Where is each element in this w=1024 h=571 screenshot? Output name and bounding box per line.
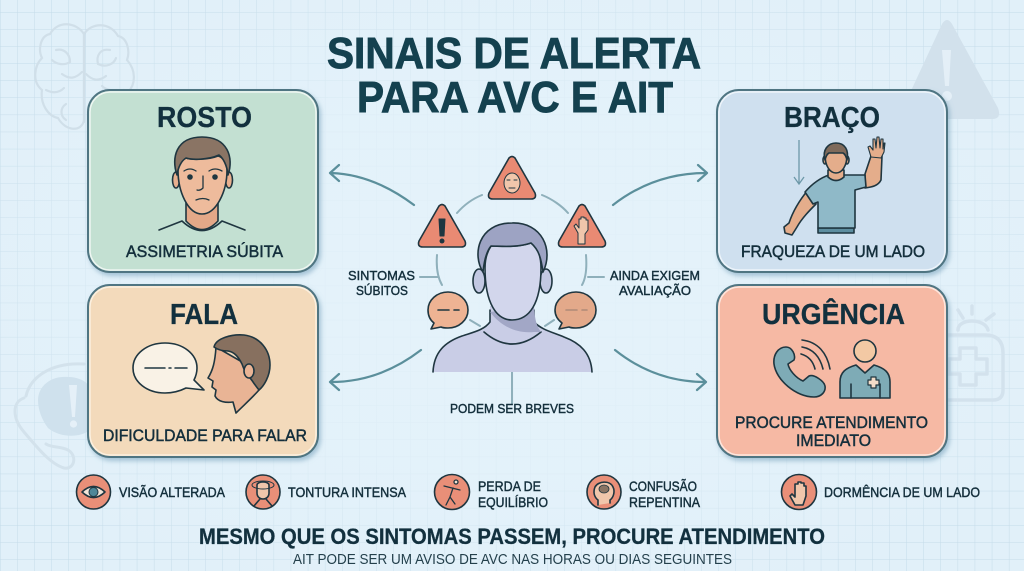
icon: face: [159, 137, 245, 230]
title: SINAIS DE ALERTA: [327, 29, 701, 78]
symptom: visão alterada: VISÃO ALTERADA: [119, 484, 226, 500]
symptom: confusão repentina: CONFUSÃO: [629, 478, 697, 494]
icon: medic: [840, 340, 890, 398]
arrow: to urgência: [615, 350, 706, 390]
label: assimetria súbita: ASSIMETRIA SÚBITA: [126, 242, 284, 261]
symptom: tontura intensa: [246, 475, 407, 509]
arrow: to rosto: [330, 165, 414, 205]
heading: fala: FALA: [170, 299, 238, 331]
label: podem ser breves: PODEM SER BREVES: [450, 401, 574, 416]
warning triangle: hand: [558, 204, 606, 247]
symptom: perda de equilíbrio: [434, 474, 548, 510]
icon: arrow down: [794, 140, 804, 184]
heading: braço: BRAÇO: [784, 102, 880, 134]
panel: urgência: [717, 285, 947, 457]
panel: braço: [717, 90, 947, 272]
panel: rosto: [88, 90, 318, 272]
label: ainda exigem avaliação: AINDA EXIGEM: [610, 268, 700, 283]
speech bubble: right: [555, 292, 596, 329]
icon: head in profile: [208, 335, 270, 413]
closing message: MESMO QUE OS SINTOMAS PASSEM, PROCURE ATENDIMENTO: [199, 524, 825, 549]
label: sintomas súbitos: SINTOMAS: [348, 268, 415, 283]
icon: speech bubble: [133, 343, 204, 393]
icon: person raising arm: [784, 137, 885, 235]
closing message: [199, 524, 825, 568]
speech bubble: left: [428, 292, 468, 329]
label: dificuldade para falar: DIFICULDADE PARA FALAR: [103, 426, 307, 445]
symptom: tontura intensa: TONTURA INTENSA: [288, 484, 407, 500]
label: ainda exigem avaliação: AVALIAÇÃO: [619, 283, 691, 298]
background icon: phone with alert: [15, 364, 90, 468]
panel: fala: [88, 285, 318, 457]
heading: rosto: ROSTO: [157, 102, 252, 134]
background icon: medical kit with siren: [945, 306, 1003, 400]
background icon: brain: [35, 24, 134, 129]
symptom: confusão repentina: [587, 475, 701, 510]
background icon: warning triangle: [901, 20, 999, 119]
symptom: dormência de um lado: [782, 474, 980, 510]
label: procure atendimento imediato: [735, 413, 928, 450]
symptom: confusão repentina: REPENTINA: [629, 494, 701, 510]
label: procure atendimento imediato: IMEDIATO: [796, 431, 871, 450]
warning triangle: face: [488, 156, 536, 199]
arrow: to fala: [330, 350, 421, 390]
title: PARA AVC E AIT: [357, 73, 673, 122]
central person: [433, 223, 592, 372]
closing message: AIT PODE SER UM AVISO DE AVC NAS HORAS OU DIAS SEGUINTES: [293, 551, 732, 568]
connector ring: [420, 195, 604, 404]
title: [327, 29, 701, 122]
warning triangle: exclamation: [418, 204, 466, 247]
arrow: to braço: [613, 165, 707, 205]
icon: phone: [774, 340, 830, 397]
label: procure atendimento imediato: PROCURE ATENDIMENTO: [735, 413, 928, 432]
symptom: visão alterada: [76, 475, 226, 509]
symptom: dormência de um lado: DORMÊNCIA DE UM LADO: [824, 484, 980, 500]
symptom: perda de equilíbrio: EQUILÍBRIO: [478, 494, 548, 510]
symptom: perda de equilíbrio: PERDA DE: [478, 478, 541, 494]
heading: urgência: URGÊNCIA: [762, 297, 905, 331]
label: sintomas súbitos: SÚBITOS: [356, 283, 408, 298]
label: fraqueza de um lado: FRAQUEZA DE UM LADO: [741, 242, 925, 261]
label: sintomas súbitos: [348, 268, 415, 298]
label: ainda exigem avaliação: [610, 268, 700, 298]
